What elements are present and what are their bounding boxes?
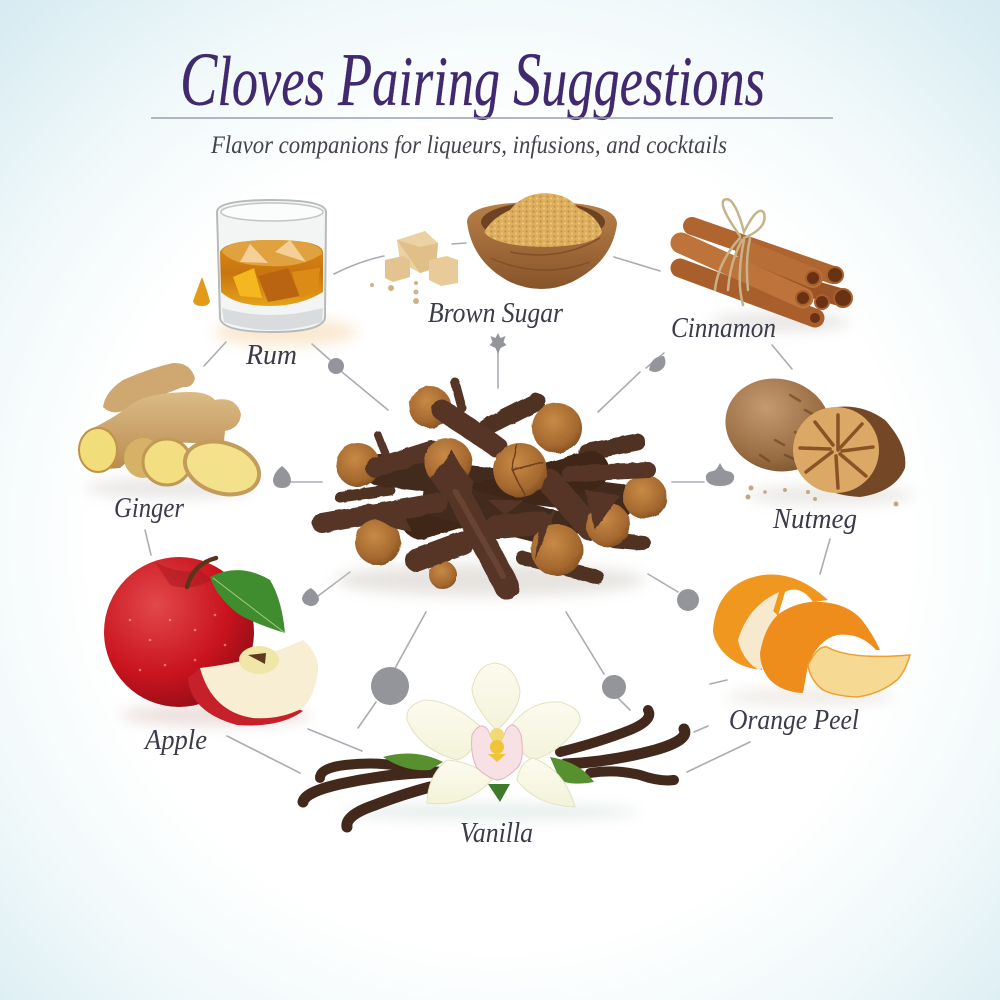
sepals <box>360 488 620 560</box>
icon: orange peel <box>713 574 910 705</box>
back buds <box>409 386 451 428</box>
label: Apple: Apple <box>143 724 207 756</box>
icon: rum glass <box>193 200 357 346</box>
title: Cloves Pairing Suggestions <box>180 38 765 122</box>
connector lines <box>145 243 830 773</box>
label: Brown Sugar: Brown Sugar <box>428 297 564 329</box>
label: Ginger: Ginger <box>114 492 185 524</box>
mid stems <box>322 382 648 560</box>
label: Orange Peel: Orange Peel <box>729 704 859 736</box>
label: Rum: Rum <box>245 339 297 371</box>
icon: apple <box>104 557 318 726</box>
title rule <box>151 117 833 119</box>
front buds <box>355 519 401 565</box>
subtitle: Flavor companions for liqueurs, infusions, and cocktails <box>210 132 727 159</box>
icon: cinnamon bundle <box>680 199 852 331</box>
label: Vanilla: Vanilla <box>460 817 533 849</box>
label: Nutmeg: Nutmeg <box>772 503 857 535</box>
label: Cinnamon: Cinnamon <box>671 312 776 344</box>
back stems <box>340 402 643 577</box>
icon: ginger <box>79 363 266 503</box>
front stem <box>450 478 507 587</box>
icon: clove pile <box>322 382 667 596</box>
icon: connector ornaments <box>273 333 734 705</box>
icon: nutmeg <box>715 367 915 506</box>
icon: brown sugar cubes and bowl <box>370 193 617 304</box>
icon: vanilla flower and pods <box>303 663 685 827</box>
